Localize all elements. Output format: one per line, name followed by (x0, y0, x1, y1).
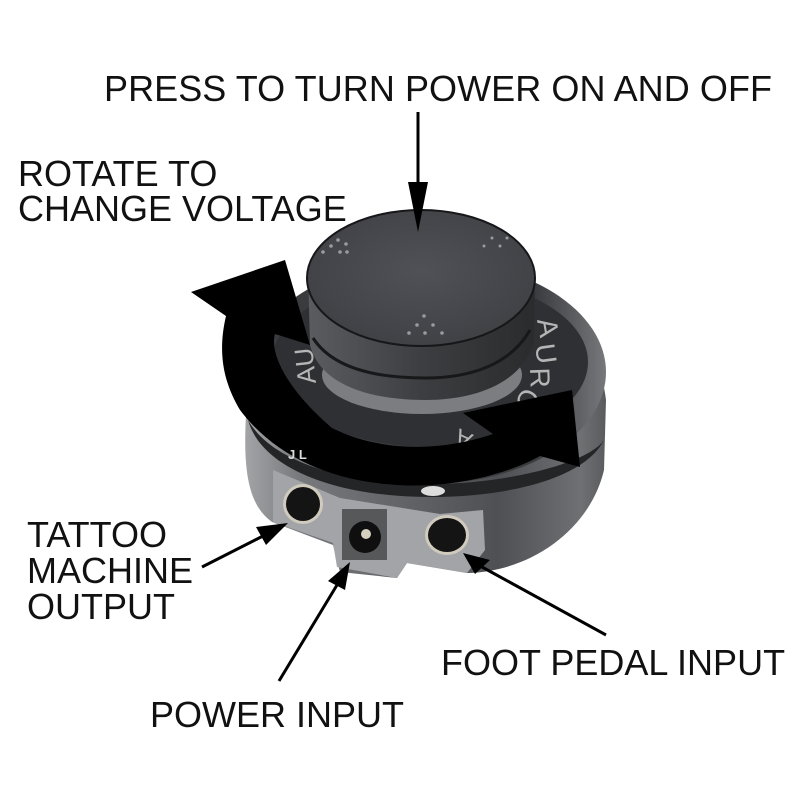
dial lettering: A (451, 423, 477, 454)
dial lettering: U (529, 342, 563, 366)
label: power input: POWER INPUT (150, 694, 404, 735)
knob top face (307, 210, 535, 346)
dial lettering: AU (288, 346, 322, 386)
JL label: J L (288, 447, 307, 462)
arrow: tattoo machine output (202, 523, 288, 567)
dial lettering: C (509, 383, 546, 416)
port: foot pedal input (425, 515, 469, 555)
top surface (250, 260, 606, 484)
arrow: power input (279, 562, 350, 681)
arrow: power button (408, 112, 428, 232)
label: tattoo machine output: OUTPUT (27, 586, 175, 627)
knob groove (313, 330, 530, 378)
device body (245, 283, 606, 578)
dial plate (272, 277, 588, 447)
dial lettering: A (531, 316, 565, 340)
knob base collar (322, 336, 522, 414)
dial lettering: R (524, 367, 556, 388)
label: tattoo machine output: TATTOO (27, 514, 167, 555)
label: rotate to change voltage: ROTATE TO (18, 153, 217, 194)
arrow: foot pedal input (463, 553, 606, 635)
label: foot pedal input: FOOT PEDAL INPUT (441, 642, 785, 683)
dark lower band (248, 420, 604, 497)
label: tattoo machine output: MACHINE (27, 550, 193, 591)
rotation arrow (191, 260, 580, 486)
port: tattoo machine output (283, 484, 323, 524)
port panel (273, 470, 485, 578)
port: power input (342, 509, 387, 560)
heading: power button label: PRESS TO TURN POWER ON AND OFF (104, 68, 772, 109)
knob side (308, 270, 535, 400)
knob top dots (321, 236, 508, 335)
device: power supply photo illustration (191, 210, 606, 578)
white indicator (421, 486, 445, 496)
label: rotate to change voltage: CHANGE VOLTAGE (18, 188, 347, 229)
dial lettering (288, 316, 565, 454)
